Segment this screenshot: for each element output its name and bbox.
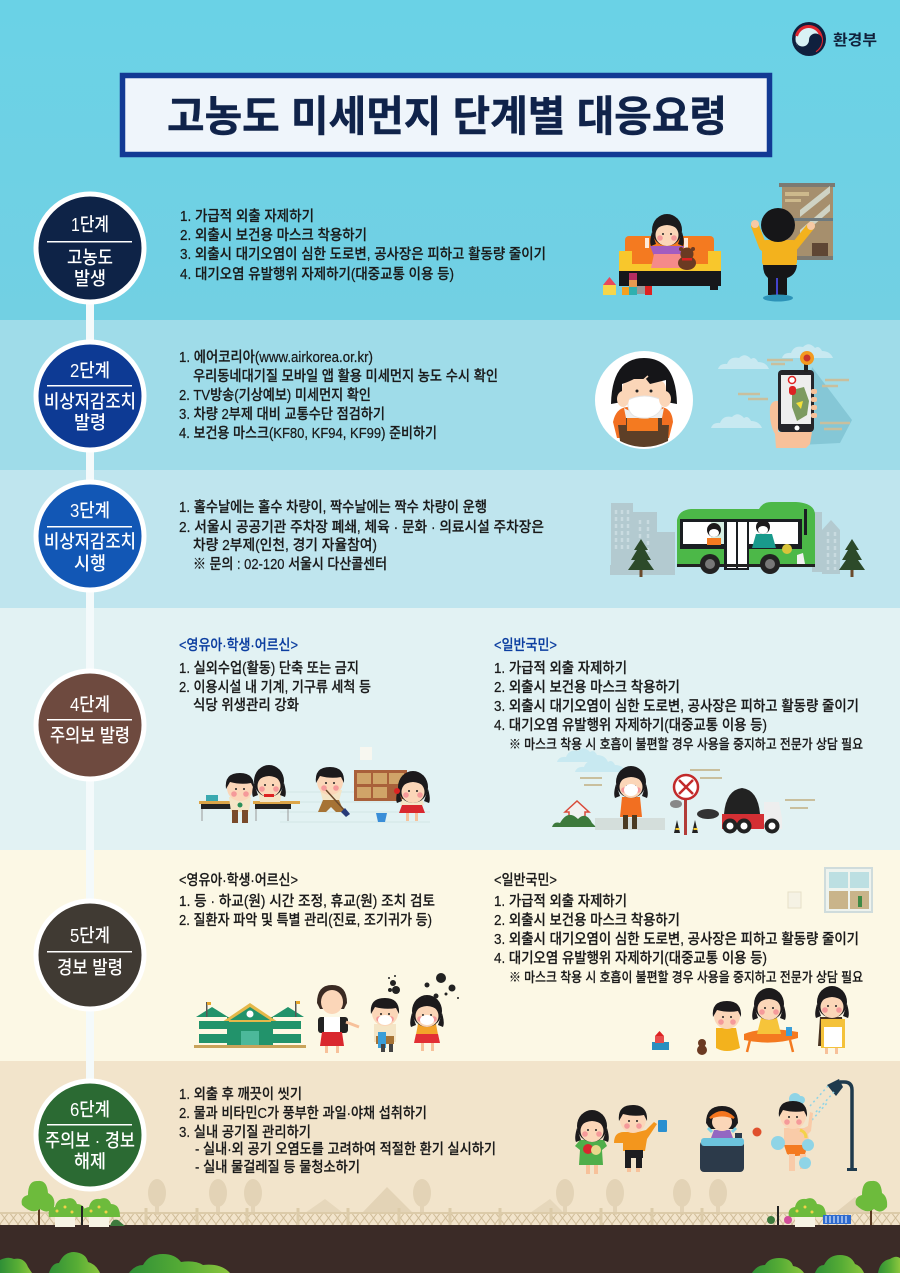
title [122, 76, 770, 154]
illustration: children cleaning classroom [199, 747, 430, 823]
right street trees, planter and bench [767, 1181, 887, 1227]
panel: step 3 background [0, 470, 900, 608]
illustration: phone with air quality map [711, 344, 852, 448]
step 6 list: 2. 물과 비타민C가 풍부한 과일·야채 섭취하기 [179, 1105, 427, 1122]
step badge 6 [36, 1081, 144, 1189]
step badge 6: 해제 [74, 1151, 106, 1172]
illustration: window [788, 868, 872, 912]
step 4 general public list: 2. 외출시 보건용 마스크 착용하기 [494, 679, 680, 696]
step 4 children list [179, 637, 371, 714]
step 4 children list: 식당 위생관리 강화 [193, 697, 299, 714]
step 3 list: 1. 홀수날에는 홀수 차량이, 짝수날에는 짝수 차량이 운행 [179, 499, 487, 516]
step 6 list: 1. 외출 후 깨끗이 씻기 [179, 1086, 302, 1103]
step badge 1: 고농도 [67, 247, 113, 268]
step 5 children list: 1. 등 · 하교(원) 시간 조정, 휴교(원) 조치 검토 [179, 893, 435, 910]
step 5 general public list: 3. 외출시 대기오염이 심한 도로변, 공사장은 피하고 활동량 줄이기 [494, 931, 859, 948]
step 2 list: 3. 차량 2부제 대비 교통수단 점검하기 [179, 406, 385, 423]
step badge 2: 비상저감조치 [44, 391, 136, 412]
step 2 list: 4. 보건용 마스크(KF80, KF94, KF99) 준비하기 [179, 425, 437, 442]
step 5 children list: <영유아·학생·어르신> [179, 872, 298, 889]
step 5 children list [179, 872, 435, 929]
step 4 general public list: ※ 마스크 착용 시 호흡이 불편할 경우 사용을 중지하고 전문가 상담 필요 [509, 736, 863, 752]
step badge 1: 1단계 [71, 214, 109, 235]
road [0, 1225, 900, 1273]
bushes along the road left [0, 1252, 230, 1273]
step 1 list: 3. 외출시 대기오염이 심한 도로변, 공사장은 피하고 활동량 줄이기 [180, 246, 546, 263]
lattice fence [0, 1208, 900, 1225]
step badge 4 [36, 671, 144, 779]
step 1 list: 2. 외출시 보건용 마스크 착용하기 [180, 227, 367, 244]
step 2 list: 1. 에어코리아(www.airkorea.or.kr) [179, 349, 373, 366]
step 5 general public list: ※ 마스크 착용 시 호흡이 불편할 경우 사용을 중지하고 전문가 상담 필요 [509, 969, 863, 985]
step 6 list: - 실내 물걸레질 등 물청소하기 [195, 1159, 360, 1176]
step 4 children list: <영유아·학생·어르신> [179, 637, 298, 654]
step 1 list [180, 208, 546, 283]
panel: step 2 background [0, 320, 900, 470]
panel: step 5 background [0, 850, 900, 1061]
step 5 children list: 2. 질환자 파악 및 특별 관리(진료, 조기귀가 등) [179, 912, 432, 929]
step 4 children list: 1. 실외수업(활동) 단축 또는 금지 [179, 660, 359, 677]
step badge 6: 주의보 · 경보 [45, 1130, 135, 1151]
illustration: girl washing face at basin [700, 1106, 762, 1172]
step badge 3 [36, 482, 144, 590]
step 1 list: 4. 대기오염 유발행위 자제하기(대중교통 이용 등) [180, 266, 454, 283]
step 4 general public list: <일반국민> [494, 637, 557, 654]
step 5 general public list: 4. 대기오염 유발행위 자제하기(대중교통 이용 등) [494, 950, 767, 967]
ministry logo: 환경부 [833, 32, 877, 49]
illustration: child showering [771, 1079, 857, 1171]
illustration: girl near polluting truck [552, 748, 815, 835]
step badge 3: 비상저감조치 [44, 531, 136, 552]
step badge 4: 4단계 [70, 694, 110, 715]
panel: step 6 background [0, 1061, 900, 1225]
illustration: children with fruit and water [575, 1105, 667, 1174]
step 4 general public list: 3. 외출시 대기오염이 심한 도로변, 공사장은 피하고 활동량 줄이기 [494, 698, 859, 715]
step 4 general public list [494, 637, 863, 752]
step 6 list: - 실내·외 공기 오염도를 고려하여 적절한 환기 실시하기 [195, 1141, 496, 1158]
step badge 2 [36, 342, 144, 450]
timeline connector [86, 290, 94, 1190]
step badge 2: 발령 [74, 412, 106, 433]
ministry logo [792, 22, 877, 56]
step 5 general public list: <일반국민> [494, 872, 557, 889]
illustration: city skyline [610, 503, 840, 575]
step 4 children list: 2. 이용시설 내 기계, 기구류 세척 등 [179, 679, 371, 696]
illustration: girl wearing mask [595, 351, 693, 449]
illustration: girl on sofa with toys [603, 214, 721, 295]
step 2 list: 2. TV방송(기상예보) 미세먼지 확인 [179, 387, 371, 404]
step 2 list [179, 349, 498, 442]
step 3 list: ※ 문의 : 02-120 서울시 다산콜센터 [193, 556, 387, 573]
title: 고농도 미세먼지 단계별 대응요령 [167, 93, 727, 140]
step badge 2: 2단계 [70, 360, 110, 381]
step 3 list: 차량 2부제(인천, 경기 자율참여) [193, 537, 377, 554]
step 2 list: 우리동네대기질 모바일 앱 활용 미세먼지 농도 수시 확인 [193, 368, 498, 385]
step badge 5: 5단계 [70, 925, 110, 946]
step badge 5: 경보 발령 [57, 957, 123, 978]
step 6 list [179, 1086, 496, 1176]
step 4 general public list: 4. 대기오염 유발행위 자제하기(대중교통 이용 등) [494, 717, 767, 734]
step badge 3: 3단계 [70, 500, 110, 521]
step badge 6: 6단계 [70, 1099, 110, 1120]
step badge 3: 시행 [74, 553, 106, 574]
step badge 5 [36, 901, 144, 1009]
panel: sky header and step 1 background [0, 0, 900, 320]
step badge 1 [36, 194, 144, 302]
step 4 general public list: 1. 가급적 외출 자제하기 [494, 660, 627, 677]
step 6 list: 3. 실내 공기질 관리하기 [179, 1124, 311, 1141]
illustration: green bus [677, 502, 815, 574]
step 3 list [179, 499, 544, 573]
step 5 general public list: 2. 외출시 보건용 마스크 착용하기 [494, 912, 680, 929]
illustration: pine trees [628, 539, 865, 577]
step badge 1: 발생 [74, 268, 106, 289]
step 5 general public list: 1. 가급적 외출 자제하기 [494, 893, 627, 910]
illustration: person closing window [751, 183, 835, 302]
background hills and mountains [148, 1179, 875, 1215]
step 1 list: 1. 가급적 외출 자제하기 [180, 208, 314, 225]
bushes along the road right [752, 1255, 900, 1273]
step 5 general public list [494, 872, 863, 985]
illustration: teacher and masked children with dust [317, 973, 459, 1053]
left street trees and planters [22, 1181, 125, 1227]
illustration: school building [194, 1001, 306, 1048]
illustration: children drinking at table with mother [652, 986, 849, 1055]
panel: step 4 background [0, 608, 900, 850]
step 3 list: 2. 서울시 공공기관 주차장 폐쇄, 체육 · 문화 · 의료시설 주차장은 [179, 519, 544, 536]
step badge 4: 주의보 발령 [50, 725, 130, 746]
